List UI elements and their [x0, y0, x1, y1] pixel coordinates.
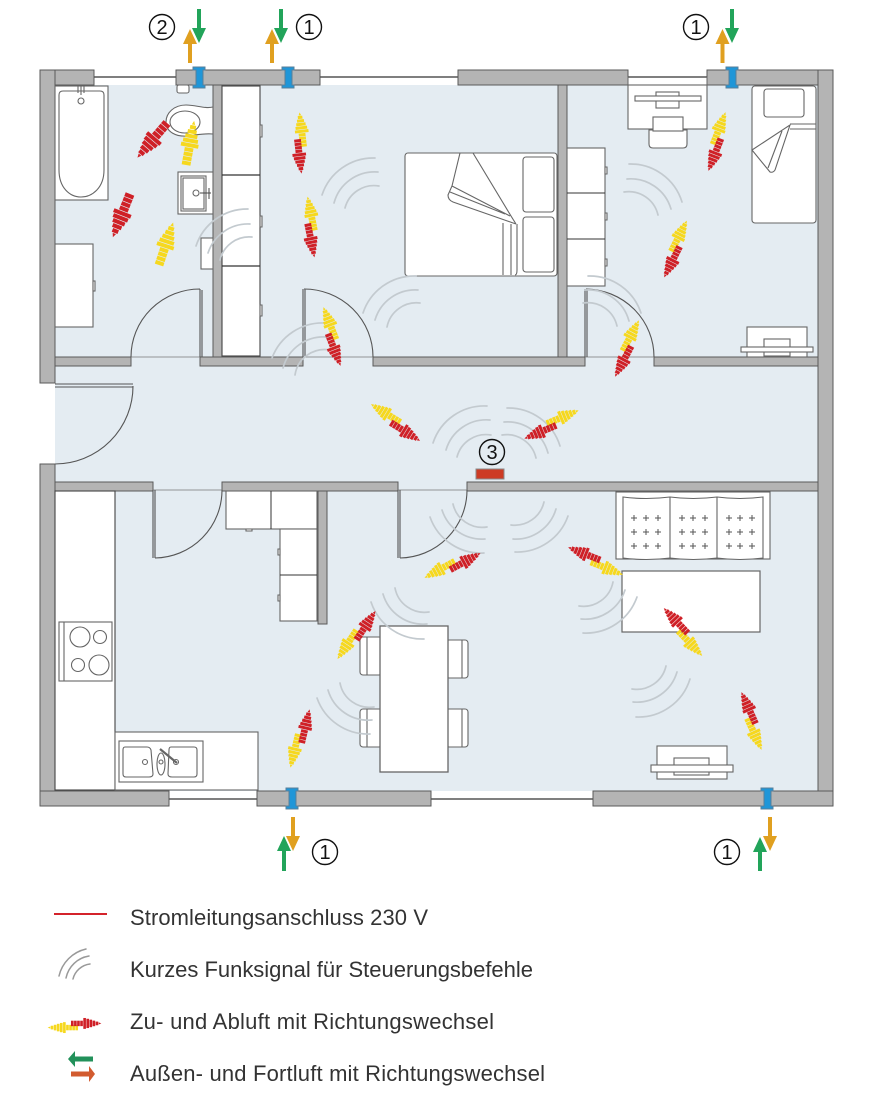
legend: radio signal [59, 949, 533, 982]
furniture: tv living room [651, 746, 733, 779]
doors [55, 289, 654, 558]
legend: outside and outgoing air [68, 1051, 545, 1086]
furniture: kitchen counter and stove [55, 491, 115, 790]
marker 3: 3 [486, 442, 498, 464]
furniture: double bed [405, 153, 557, 276]
radio signal arcs [196, 158, 690, 734]
furniture: kitchen sink [115, 732, 258, 790]
legend: supply and exhaust air: Zu- und Abluft mit Richtungswechsel [130, 1009, 494, 1034]
ventilation units [193, 67, 773, 809]
furniture: coffee table [622, 571, 760, 632]
floor plan [40, 67, 833, 809]
legend: outside and outgoing air: Außen- und Fortluft mit Richtungswechsel [130, 1061, 545, 1086]
furniture: sofa [616, 492, 770, 560]
marker 1 top centre: 1 [303, 17, 315, 39]
furniture: dining table with chairs [360, 626, 468, 772]
marker 3 [480, 440, 504, 464]
marker 2 [150, 14, 174, 40]
supply and exhaust airflow arrows [104, 110, 773, 770]
furniture: single bed [752, 86, 816, 223]
marker 1 top right: 1 [690, 17, 702, 39]
marker 1 top centre [296, 14, 322, 40]
walls [40, 70, 833, 806]
furniture: desk [628, 77, 707, 148]
furniture: tv room 3 [741, 327, 813, 357]
marker 1 bottom centre: 1 [319, 842, 331, 864]
floor area [55, 85, 818, 791]
marker 2: 2 [156, 17, 168, 39]
furniture: room 3 wardrobe [567, 148, 607, 286]
furniture: kitchen wall cabinets [226, 491, 317, 621]
outside air arrows [183, 9, 777, 871]
marker 1 bottom right: 1 [721, 842, 733, 864]
marker 1 top right [684, 14, 708, 40]
marker 1 bottom centre [312, 840, 338, 864]
control unit (red) [476, 469, 504, 479]
legend: radio signal: Kurzes Funksignal für Steuerungsbefehle [130, 957, 533, 982]
legend [48, 905, 545, 1086]
legend: power line: Stromleitungsanschluss 230 V [130, 905, 428, 930]
furniture: bathroom [55, 85, 213, 327]
marker 1 bottom right [714, 840, 740, 864]
furniture: wardrobe hall [222, 86, 262, 356]
